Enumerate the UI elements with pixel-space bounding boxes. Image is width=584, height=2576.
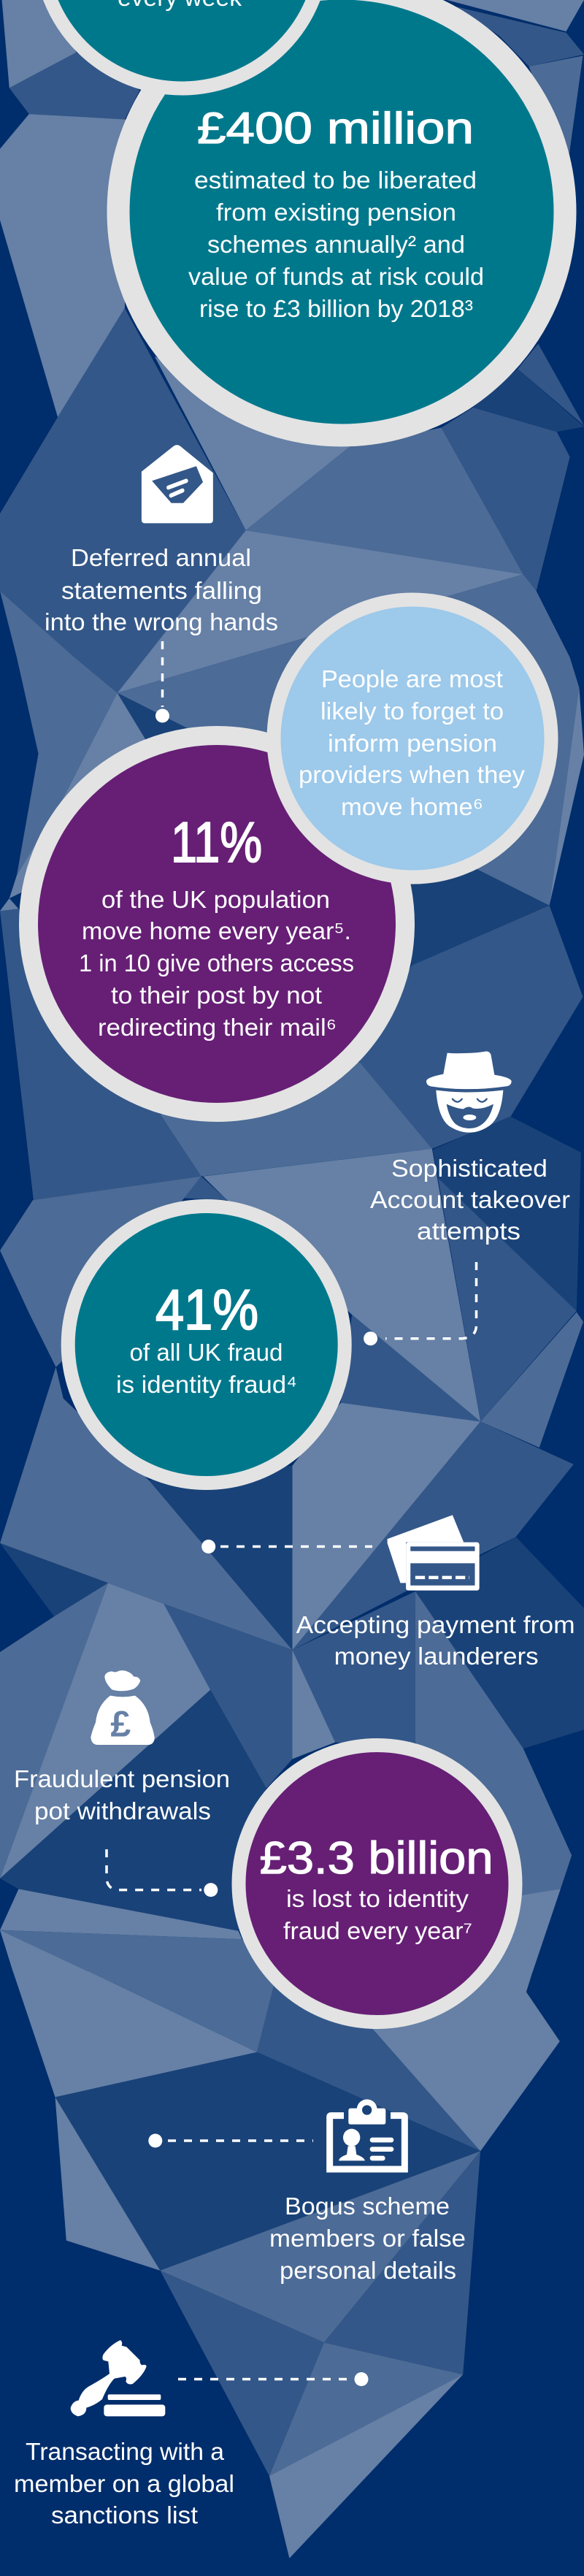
panel: 41% teal circle [68,1207,345,1483]
panel: £400 million circle [118,0,565,435]
heading: 11%: 11% [171,810,262,874]
text block: forget to inform providers [299,665,526,820]
label: bogus scheme members: personal details [280,2257,456,2284]
text block: lost every year: fraud every year⁷ [283,1917,472,1944]
panel: light blue circle [274,600,551,877]
label: money launderers: money launderers [334,1643,539,1670]
text block: liberated funds: estimated to be liberated [194,167,477,194]
icon: open envelope [142,445,213,523]
label: global sanctions list: member on a global [14,2470,234,2497]
label: deferred annual statements: Deferred annual [71,544,251,571]
text block: population moving home [79,886,354,1041]
label: deferred annual statements: into the wrong hands [45,608,278,635]
icon: masked man in hat [426,1051,512,1133]
connector: 41% to cards [201,1540,372,1553]
label: deferred annual statements: statements falling [61,577,262,604]
label: fraudulent withdrawals: pot withdrawals [34,1797,211,1824]
text block: forget to inform providers: People are most [321,665,503,692]
text block: liberated funds [188,167,484,322]
label: global sanctions list [14,2438,234,2529]
text block: population moving home: move home every year⁵. [82,917,351,944]
label: bogus scheme members [269,2193,466,2284]
text block: liberated funds: value of funds at risk could [188,263,484,290]
label: money launderers [296,1611,575,1670]
label: bogus scheme members: Bogus scheme [285,2193,450,2220]
connector: takeover to 41% [364,1262,476,1345]
icon: money bag: £ [110,1704,131,1745]
text block: liberated funds: schemes annually² and [207,231,465,258]
connector: gavel to dot [178,2372,368,2386]
label: bogus scheme members: members or false [269,2225,466,2252]
text block: population moving home: redirecting their mail⁶ [98,1014,337,1041]
text block: identity fraud: is identity fraud⁴ [116,1371,297,1398]
text block: population moving home: to their post by not [111,982,322,1009]
connector: dot to ID badge [148,2134,313,2147]
label: deferred annual statements [45,544,278,635]
heading: £3.3 billion: £3.3 billion [260,1833,493,1884]
text block: identity fraud: of all UK fraud [130,1339,283,1366]
label: money launderers: Accepting payment from [296,1611,575,1638]
icon: ID badge [330,2099,404,2169]
panel: £3.3 billion purple circle [239,1746,515,2022]
text block: liberated funds: rise to £3 billion by 2018³ [199,295,473,322]
icon: payment cards [388,1515,480,1591]
text block: population moving home: of the UK population [101,886,330,913]
icon: money bag [91,1670,155,1745]
panel: top teal circle [40,0,323,88]
text block: population moving home: 1 in 10 give others access [79,949,354,976]
label: fraudulent withdrawals: Fraudulent pension [14,1765,230,1792]
label: account takeover [370,1155,570,1245]
text block: forget to inform providers: move home⁶ [341,793,483,820]
text block: lost every year: is lost to identity [286,1885,469,1912]
label: account takeover: Sophisticated [391,1155,548,1182]
connector: statements to 11% [155,641,169,723]
label: account takeover: attempts [417,1218,520,1245]
heading: 41%: 41% [155,1277,258,1342]
text block: liberated funds: from existing pension [216,199,456,226]
text block: identity fraud [116,1339,297,1398]
text block: lost every year [283,1885,472,1944]
heading: £400 million: £400 million [197,104,474,153]
label: global sanctions list: Transacting with a [26,2438,225,2465]
text block: forget to inform providers: providers when they [299,761,526,788]
connector: withdrawals to £3.3 billion [107,1849,218,1897]
label: global sanctions list: sanctions list [51,2502,198,2529]
text block: forget to inform providers: inform pension [328,730,497,757]
icon: gavel [71,2340,165,2416]
label: account takeover: Account takeover [370,1186,570,1213]
panel: 11% purple circle [28,735,405,1112]
label: fraudulent withdrawals [14,1765,230,1824]
text block: forget to inform providers: likely to forget to [320,697,504,725]
